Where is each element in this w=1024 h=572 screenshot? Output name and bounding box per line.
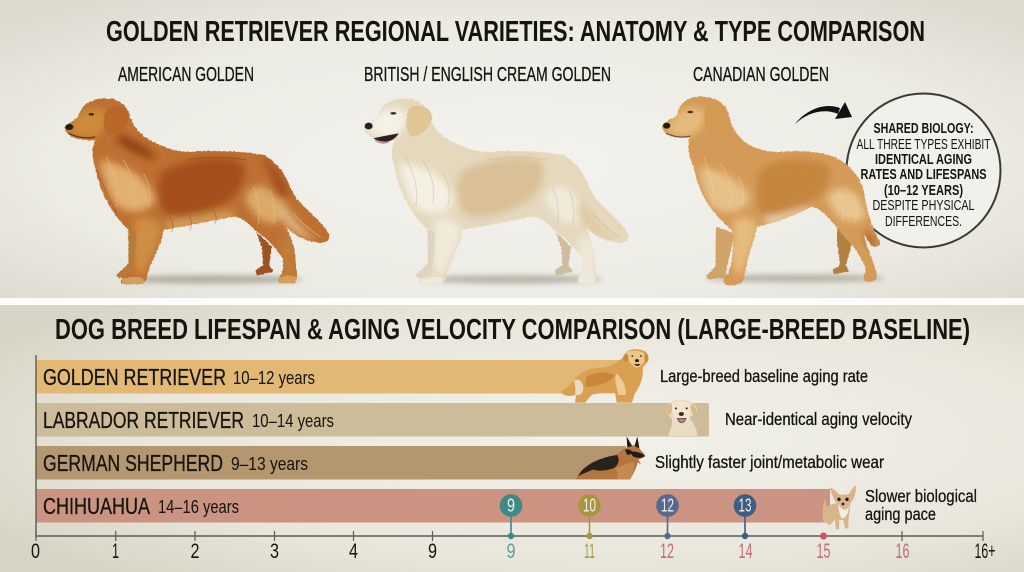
x axis: 1 — [112, 540, 119, 563]
marker: 15 dot — [820, 532, 827, 540]
marker: 10 — [578, 494, 601, 539]
x axis: 9 — [506, 540, 516, 563]
x axis: 4 — [349, 540, 358, 563]
note: labrador: Near-identical aging velocity — [725, 409, 912, 429]
callout: shared biology: SHARED BIOLOGY: — [874, 121, 974, 137]
marker: 10: 10 — [583, 496, 596, 516]
icon: golden retriever — [561, 349, 649, 403]
x axis: 2 — [190, 540, 200, 563]
label: British golden: BRITISH / ENGLISH CREAM GOLDEN — [364, 63, 611, 86]
dog: Canadian golden — [659, 93, 885, 290]
x axis: 11 — [584, 540, 595, 563]
label: American golden: AMERICAN GOLDEN — [118, 63, 254, 86]
note: chihuahua: Slower biological — [865, 486, 977, 506]
icon: labrador — [666, 400, 697, 436]
section divider — [0, 298, 1024, 305]
top panel background — [0, 0, 1024, 298]
x axis: 9 — [428, 540, 437, 563]
arrow to callout — [795, 102, 852, 124]
marker: 9 — [500, 494, 522, 539]
bar: German Shepherd: 9–13 years — [231, 453, 308, 474]
note: golden: Large-breed baseline aging rate — [660, 366, 868, 386]
icon: chihuahua — [823, 485, 856, 529]
dog: American golden — [60, 93, 337, 290]
x axis: 16+ — [974, 540, 996, 563]
callout: shared biology: RATES AND LIFESPANS — [860, 167, 987, 183]
bar: German Shepherd: GERMAN SHEPHERD — [43, 450, 223, 476]
icon: german shepherd — [576, 437, 645, 479]
bar: Chihuahua — [36, 489, 830, 522]
marker: 13: 13 — [738, 496, 752, 516]
marker: 12: 12 — [661, 496, 674, 516]
bar: Chihuahua: 14–16 years — [158, 496, 239, 517]
x axis: 15 — [816, 540, 830, 563]
note: chihuahua: aging pace — [865, 504, 936, 524]
note: german shepherd: Slightly faster joint/metabolic wear — [655, 452, 884, 472]
bar: Golden Retriever — [36, 360, 623, 394]
bar: Chihuahua: CHIHUAHUA — [43, 493, 151, 519]
bar: Labrador Retriever: LABRADOR RETRIEVER — [43, 407, 244, 433]
marker: 12 — [656, 494, 679, 539]
callout: shared biology — [846, 94, 1000, 248]
bar: German Shepherd — [36, 446, 626, 480]
marker: 13 — [734, 494, 756, 539]
bottom panel background — [0, 305, 1024, 572]
bar: Golden Retriever: 10–12 years — [233, 367, 315, 388]
bar: Labrador Retriever — [36, 403, 709, 436]
bar: Golden Retriever: GOLDEN RETRIEVER — [43, 364, 226, 390]
marker: 9: 9 — [507, 496, 515, 516]
callout: shared biology: DESPITE PHYSICAL — [872, 198, 974, 214]
x axis: 3 — [270, 540, 279, 563]
callout: shared biology: IDENTICAL AGING — [875, 152, 972, 168]
x axis: 16 — [896, 540, 910, 563]
callout: shared biology: DIFFERENCES. — [885, 214, 962, 230]
label: Canadian golden: CANADIAN GOLDEN — [693, 63, 829, 86]
x axis: 0 — [31, 540, 40, 563]
note: chihuahua — [865, 486, 977, 524]
x axis — [31, 355, 996, 563]
x axis: 14 — [738, 540, 753, 563]
bar: Labrador Retriever: 10–14 years — [252, 410, 334, 431]
dog: British cream golden — [359, 93, 636, 290]
callout: shared biology: (10–12 YEARS) — [884, 183, 963, 199]
x axis: 12 — [660, 540, 674, 563]
